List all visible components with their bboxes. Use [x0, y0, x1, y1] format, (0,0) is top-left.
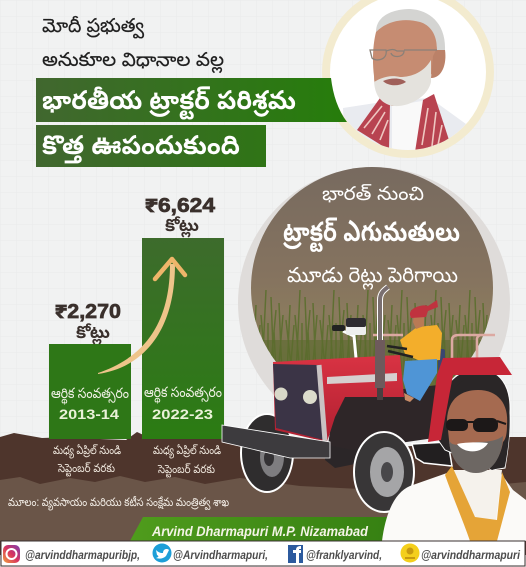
export circle panel	[238, 167, 510, 395]
ground	[0, 432, 526, 555]
axle	[325, 445, 365, 468]
icon: twitter	[152, 544, 172, 562]
roll bar	[373, 335, 495, 358]
icon: instagram	[3, 545, 20, 563]
tyre behind head	[450, 375, 510, 470]
body	[382, 472, 526, 541]
bar: 2022-23: 2022-23	[152, 406, 213, 422]
bar: 2022-23: ఆర్థిక సంవత్సరం	[144, 384, 222, 404]
exhaust pipe	[375, 287, 388, 400]
banner: line 2	[36, 125, 266, 167]
period label: bar 2	[153, 444, 221, 478]
period label: bar 1: మధ్య ఏప్రిల్ నుండి	[53, 444, 121, 459]
bar chart	[49, 195, 224, 439]
period label: bar 2: మధ్య ఏప్రిల్ నుండి	[153, 444, 221, 459]
rear fender	[428, 357, 512, 442]
bar: 2013-14: ఆర్థిక సంవత్సరం	[51, 385, 129, 405]
front bumper	[222, 425, 330, 458]
intro heading: మోదీ ప్రభుత్వ	[42, 15, 144, 39]
engine block	[328, 385, 438, 450]
value: 2,270	[55, 301, 121, 345]
grille	[273, 364, 325, 441]
beard	[449, 436, 503, 473]
mirror and lamp	[332, 318, 366, 358]
footstep	[412, 442, 452, 466]
face	[447, 390, 507, 472]
banner: line 1	[36, 78, 347, 122]
bar: 2013-14: 2013-14	[59, 406, 119, 422]
portrait: Modi	[322, 0, 494, 160]
period label: bar 1: సెప్టెంబర్ వరకు	[57, 462, 115, 477]
bar: 2013-14	[49, 344, 131, 439]
value: 6,624: కోట్లు	[165, 216, 199, 238]
handle: facebook: @franklyarvind,	[306, 550, 382, 562]
value: 2,270: కోట్లు	[76, 323, 110, 345]
name ribbon	[130, 517, 400, 541]
period label: bar 2: సెప్టెంబర్ వరకు	[157, 463, 215, 478]
tractor illustration	[222, 287, 512, 513]
export heading line 1: భారత్ నుంచి	[322, 184, 424, 205]
source note: మూలం: వ్యవసాయం మరియు కటీస సంక్షేమ మంత్రిత్వ శాఖ	[8, 496, 229, 511]
farmer	[387, 300, 442, 402]
intro heading: అనుకూల విధానాల వల్ల	[42, 50, 224, 74]
icon: rear wheel	[353, 431, 415, 513]
value: 2,270: ₹2,270	[55, 301, 121, 323]
period label: bar 1	[53, 444, 121, 477]
value: 6,624: ₹6,624	[145, 195, 216, 217]
intro heading	[42, 15, 224, 74]
value: 6,624	[145, 195, 216, 238]
rear tyre	[437, 369, 510, 470]
shirt collar	[452, 470, 502, 520]
export heading line 2: ట్రాక్టర్ ఎగుమతులు	[283, 217, 460, 252]
icon: front wheel	[240, 413, 294, 493]
portrait: Arvind Dharmapuri	[382, 375, 526, 541]
icon: snapchat	[400, 544, 420, 562]
export heading line 3: మూడు రెట్లు పెరిగాయి	[287, 264, 458, 290]
seat	[438, 349, 445, 371]
hood	[273, 355, 404, 442]
icon: facebook	[288, 545, 303, 563]
bar: 2022-23	[142, 238, 224, 439]
glasses	[446, 418, 506, 432]
arrow: growth	[98, 259, 185, 374]
banner: line 2: కొత్త ఊపందుకుంది	[42, 130, 240, 164]
banner: line 1: భారతీయ ట్రాక్టర్ పరిశ్రమ	[42, 85, 296, 120]
social media bar	[1, 541, 525, 566]
name ribbon: Arvind Dharmapuri M.P. Nizamabad	[151, 523, 368, 539]
handle: twitter: @Arvindharmapuri,	[173, 550, 268, 562]
scarf	[445, 466, 510, 541]
handle: instagram: @arvinddharmapuribjp,	[25, 550, 140, 562]
